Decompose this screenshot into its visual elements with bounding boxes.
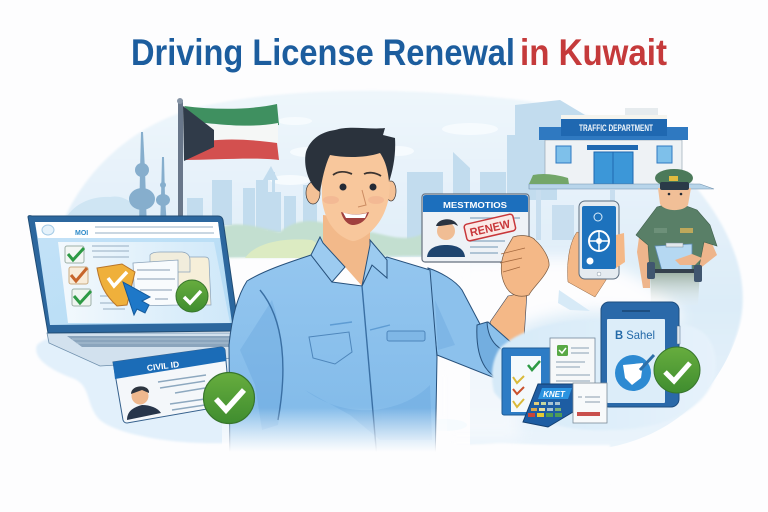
kuwait flag xyxy=(177,98,279,218)
clipboard xyxy=(655,244,692,271)
arm skin xyxy=(490,292,527,356)
hair xyxy=(305,128,395,192)
blush xyxy=(323,196,384,204)
approval paper xyxy=(550,338,595,385)
laptop: MOI xyxy=(75,230,88,237)
traffic officer xyxy=(636,169,717,305)
sahel tablet xyxy=(601,302,680,407)
title: in Kuwait xyxy=(520,32,667,73)
checklist clipboard xyxy=(502,348,552,415)
laptop xyxy=(28,216,240,443)
shirt pocket right xyxy=(387,331,425,341)
sahel tablet: B Sahel xyxy=(615,328,655,342)
smile xyxy=(341,212,369,225)
checklist panel xyxy=(58,242,230,323)
duty belt xyxy=(647,269,702,273)
holding hand xyxy=(501,236,549,296)
checkbox row 1 xyxy=(65,246,84,263)
civil id card: CIVIL ID xyxy=(146,359,180,373)
renew stamp: RENEW xyxy=(469,218,512,239)
civil id card xyxy=(113,347,230,423)
department sign xyxy=(561,119,667,136)
sahel check badge xyxy=(654,347,700,393)
receipt xyxy=(573,383,607,423)
laptop check badge xyxy=(176,280,208,312)
knet terminal: KNET xyxy=(543,390,566,399)
man bottom fade xyxy=(222,408,447,474)
shirt pocket left xyxy=(309,332,352,364)
checkbox row 2 xyxy=(69,267,88,284)
license card: MESTMOTIOS xyxy=(443,201,508,210)
neck xyxy=(323,215,370,286)
document stack xyxy=(133,252,211,306)
checkbox row 3 xyxy=(72,289,91,306)
knet terminal xyxy=(523,384,573,427)
city skyline xyxy=(68,100,585,258)
laptop shadow xyxy=(36,335,240,443)
clouds xyxy=(270,117,498,431)
officer head xyxy=(658,188,691,210)
civil id check badge xyxy=(204,372,254,424)
shield xyxy=(97,264,135,306)
building backing xyxy=(545,140,682,185)
phone in hand xyxy=(558,201,625,311)
door xyxy=(587,145,638,184)
license card xyxy=(422,194,529,262)
sahel app icon xyxy=(615,355,654,391)
shirt shading xyxy=(240,300,455,440)
kuwait towers xyxy=(129,132,170,230)
collar xyxy=(311,237,387,286)
windows xyxy=(556,146,672,163)
title: Driving License Renewal xyxy=(131,32,515,73)
officer arms xyxy=(637,230,650,288)
officer cap xyxy=(655,169,693,190)
canopy xyxy=(529,184,714,189)
officer shirt xyxy=(636,201,717,272)
right blue backdrop ellipse xyxy=(492,319,716,430)
traffic department building xyxy=(529,108,714,240)
department sign: TRAFFIC DEPARTMENT xyxy=(579,123,653,133)
eyes and brows xyxy=(333,172,381,207)
face xyxy=(321,150,390,241)
officer legs xyxy=(650,270,700,305)
man figure xyxy=(229,128,549,470)
shirt body xyxy=(229,255,437,470)
shirt sleeve xyxy=(428,268,523,384)
shirt folds xyxy=(260,286,390,470)
cursor arrow xyxy=(123,282,150,315)
ears xyxy=(306,181,396,204)
laptop base xyxy=(47,333,238,366)
laptop screen xyxy=(28,216,239,333)
